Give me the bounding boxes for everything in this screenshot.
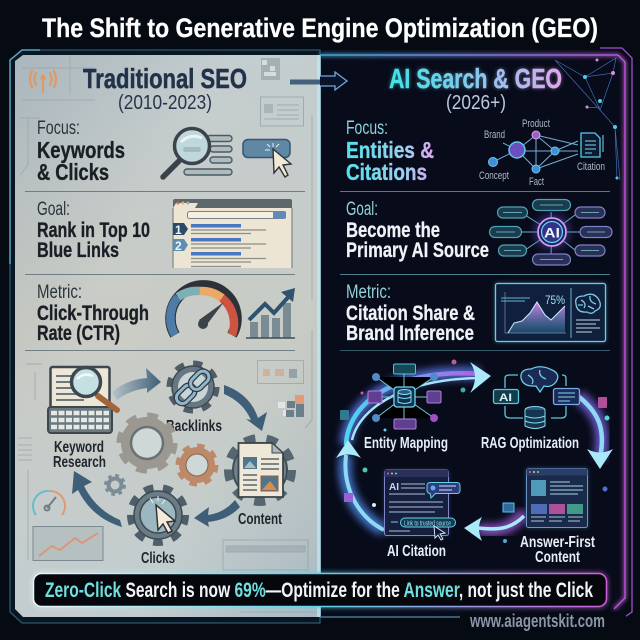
icon: large grey gear — [120, 416, 174, 470]
metric text: Brand Inference — [346, 322, 474, 345]
label: Clicks: Clicks — [141, 550, 175, 567]
icon: AI hub with answer bubbles — [490, 200, 612, 265]
icon: clicks gear — [131, 488, 185, 542]
chart: analytics dashboard — [495, 283, 606, 342]
heading years: (2010-2023) — [118, 92, 212, 114]
focus text: Keywords — [37, 137, 125, 163]
icon: mini line chart — [33, 526, 103, 560]
arrow: from SEO to GEO — [290, 72, 347, 90]
label: Content: Content — [238, 511, 282, 528]
icon: entity network: Product — [522, 118, 550, 130]
icon: search results browser: 1 — [175, 223, 182, 237]
metric text: Citation Share & — [346, 302, 475, 325]
icon: signal — [30, 71, 56, 92]
icon: magnifier with lines — [163, 128, 232, 177]
icon: entity network — [479, 118, 605, 188]
arrow: content to clicks — [194, 500, 240, 527]
label: Entity Mapping: Entity Mapping — [364, 435, 448, 452]
goal text: Blue Links — [37, 239, 119, 262]
heading: Traditional SEO: Traditional SEO — [83, 63, 247, 94]
icon: RAG loop: AI — [499, 392, 512, 404]
label: Answer-First Content: Answer-First — [520, 534, 596, 551]
goal text — [37, 199, 150, 262]
panel: AI search and GEO — [320, 48, 632, 632]
icon: gauge — [170, 285, 236, 335]
icon: AI citation window: AI — [389, 482, 399, 493]
icon: entity network: Concept — [479, 170, 509, 182]
metric text — [37, 282, 149, 345]
icon: content gear with document — [228, 438, 292, 502]
divider — [340, 350, 610, 352]
arrow: cycle top left — [346, 362, 491, 445]
label: Answer-First Content — [520, 534, 596, 566]
label: Keyword Research: Keyword — [54, 439, 104, 456]
network decoration — [555, 58, 620, 180]
arrow: backlinks to content — [224, 385, 267, 431]
divider — [340, 190, 610, 192]
goal text: Primary AI Source — [346, 239, 489, 262]
metric text: Metric: — [37, 282, 82, 303]
icon: AI citation window — [384, 470, 460, 540]
metric text: Metric: — [346, 282, 391, 303]
icon: RAG loop — [494, 367, 580, 428]
icon: entity network: Citation — [577, 161, 605, 173]
icon: entity network: Brand — [484, 129, 505, 141]
focus text: Entities & — [346, 137, 434, 163]
decoration: pixel patch and doc — [260, 58, 304, 126]
icon: orange gear — [178, 446, 216, 484]
icon: laptop with magnifier — [48, 367, 117, 433]
icon: AI citation window: Link to trusted source — [404, 520, 451, 528]
icon: entity network: Fact — [529, 176, 544, 188]
focus text — [37, 118, 125, 185]
goal text: Goal: — [37, 199, 70, 220]
icon: AI hub with answer bubbles: AI — [544, 224, 560, 240]
label: Answer-First Content: Content — [535, 549, 580, 566]
divider — [340, 274, 610, 276]
arrow: cycle right — [578, 396, 613, 469]
heading: AI Search and GEO: AI Search & GEO — [389, 63, 562, 94]
metric text — [346, 282, 475, 345]
callout: zero-click banner — [34, 574, 606, 606]
label: Keyword Research: Research — [53, 454, 106, 471]
panel: traditional SEO — [10, 50, 321, 623]
icon: search results browser: 2 — [175, 239, 182, 253]
focus text: & Clicks — [37, 159, 109, 185]
icon: backlinks gear — [170, 364, 216, 410]
arrow: cycle bottom — [464, 512, 524, 541]
focus text — [346, 118, 434, 185]
goal text — [346, 199, 489, 262]
focus text: Focus: — [346, 118, 388, 139]
divider — [25, 190, 305, 192]
arrow: laptop to backlinks — [112, 368, 161, 400]
icon: growth chart — [246, 288, 295, 338]
icon: small gear — [106, 476, 124, 494]
icon: mini gauge — [33, 491, 65, 515]
divider — [25, 350, 295, 352]
chart: analytics dashboard: 75% — [545, 293, 565, 307]
heading years: (2026+) — [446, 92, 506, 114]
heading: AI Search and GEO: AI Search & GEO — [389, 63, 562, 94]
callout: zero-click banner: Zero-Click Search is now 69%—Optimize for the Answer, not just the Click — [45, 579, 593, 602]
focus text: Focus: — [37, 118, 80, 139]
goal text: Rank in Top 10 — [37, 219, 150, 242]
decoration: ghost circuit and panels — [18, 360, 308, 570]
label: AI Citation: AI Citation — [387, 543, 446, 560]
label: Backlinks: Backlinks — [166, 418, 222, 435]
decoration: colour blocks — [263, 369, 304, 417]
icon: click button — [243, 140, 291, 177]
label: Keyword Research — [53, 439, 106, 471]
arrow: clicks to keyword research — [72, 471, 122, 527]
goal text: Goal: — [346, 199, 378, 220]
label: RAG Optimization: RAG Optimization — [481, 435, 579, 452]
icon: entity mapping — [368, 364, 441, 429]
icon: search results browser — [173, 199, 292, 268]
metric text: Click-Through — [37, 302, 149, 325]
metric text: Rate (CTR) — [37, 322, 120, 345]
focus text: Citations — [346, 159, 427, 185]
divider — [25, 274, 295, 276]
goal text: Become the — [346, 219, 440, 242]
icon: answer-first window — [526, 468, 588, 528]
decoration: floating particles — [340, 360, 610, 543]
arrow: cycle left — [336, 440, 384, 530]
